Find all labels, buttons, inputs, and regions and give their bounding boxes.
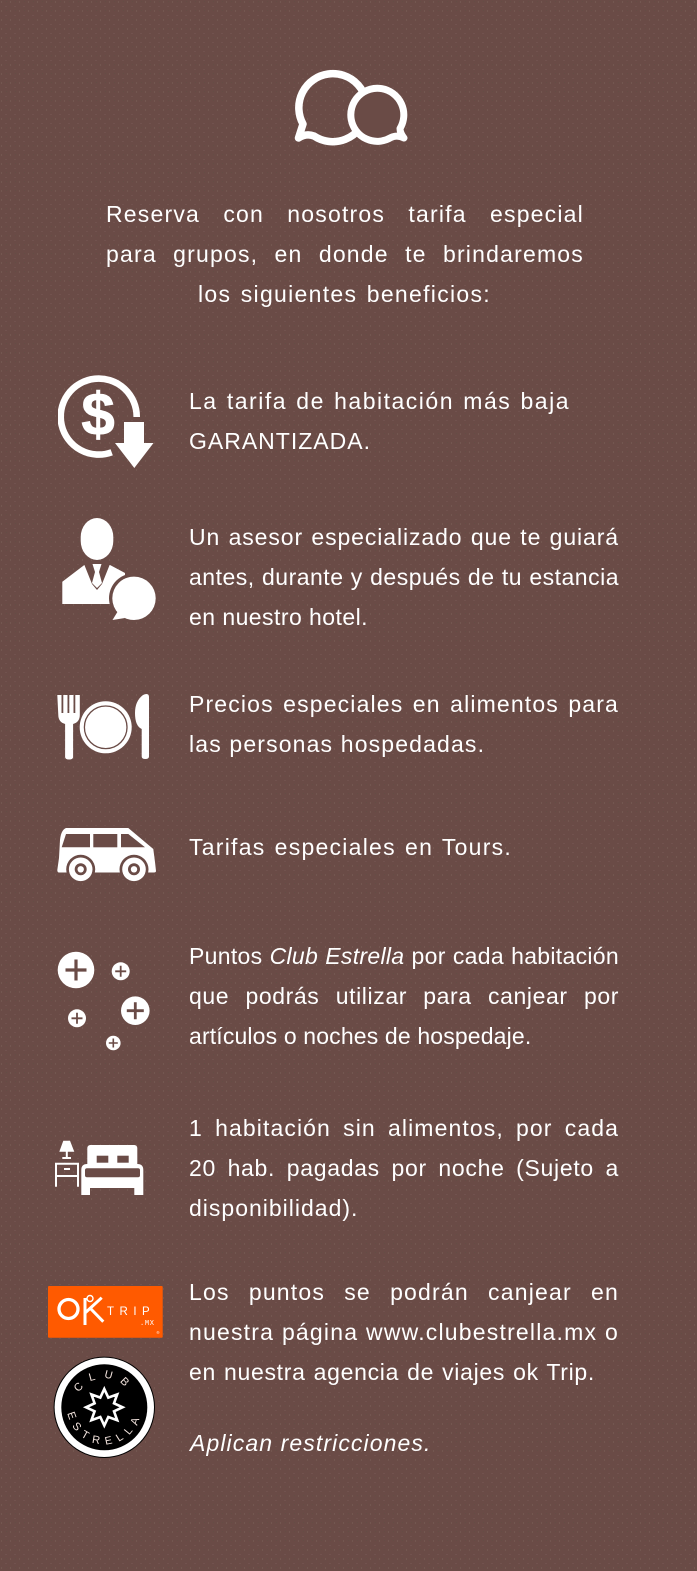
panel: food prices: las personas hospedadas. [189, 731, 485, 757]
benefit text: 1 habitación sin alimentos, por cada [189, 1115, 619, 1141]
logo: Club Estrella: ESTRELLA [67, 1412, 140, 1445]
restrictions note: Aplican restricciones. [190, 1430, 432, 1456]
panel: free room: 20 hab. pagadas por noche (Sujeto a [189, 1155, 619, 1181]
benefit text: La tarifa de habitación más baja [189, 388, 570, 414]
icon: van [57, 828, 156, 882]
benefit text: Un asesor especializado que te guiará [189, 524, 619, 550]
intro text: Reserva con nosotros tarifa especial [106, 201, 584, 227]
icon: dollar with down arrow [58, 375, 154, 468]
intro text: los siguientes beneficios: [198, 281, 491, 307]
logo: ok Trip: .MX [140, 1320, 155, 1328]
panel: specialised advisor: antes, durante y después de tu estancia [189, 564, 619, 590]
panel: specialised advisor [62, 518, 619, 630]
benefit text: Tarifas especiales en Tours. [189, 834, 512, 860]
icon: chat bubbles [294, 70, 408, 146]
icon: bed with nightstand [55, 1140, 144, 1195]
panel: redeem points [48, 1279, 619, 1458]
icon: plus circles [58, 952, 150, 1050]
panel: specialised advisor: en nuestro hotel. [189, 604, 368, 630]
benefit text: Puntos Club Estrella por cada habitación [189, 942, 619, 968]
panel: lowest rate [58, 375, 570, 468]
logo: ok Trip [48, 1286, 163, 1338]
intro text [106, 201, 584, 307]
panel: club points: artículos o noches de hospedaje. [189, 1022, 531, 1048]
panel: tours [57, 828, 512, 882]
panel: club points: que podrás utilizar para canjear por [189, 982, 619, 1008]
benefit text: Los puntos se podrán canjear en [189, 1279, 619, 1305]
panel: club points [58, 942, 619, 1050]
icon: plate and cutlery [57, 694, 149, 760]
intro text: para grupos, en donde te brindaremos [106, 241, 584, 267]
logo: ok Trip: TRIP [107, 1306, 155, 1318]
panel: free room: disponibilidad). [189, 1195, 358, 1221]
logo: ok Trip: ® [156, 1330, 160, 1335]
panel: redeem points: en nuestra agencia de viajes ok Trip. [189, 1359, 595, 1385]
panel: food prices [57, 691, 619, 760]
panel: free room [55, 1115, 619, 1221]
panel: redeem points: nuestra página www.clubestrella.mx o [189, 1319, 619, 1345]
benefit text: GARANTIZADA. [189, 428, 371, 454]
benefit text: Precios especiales en alimentos para [189, 691, 619, 717]
logo: Club Estrella [54, 1356, 155, 1458]
icon: dollar with down arrow: $ [81, 381, 115, 448]
logo: Club Estrella: CLUB [74, 1370, 129, 1391]
icon: advisor with speech bubble [62, 518, 156, 620]
